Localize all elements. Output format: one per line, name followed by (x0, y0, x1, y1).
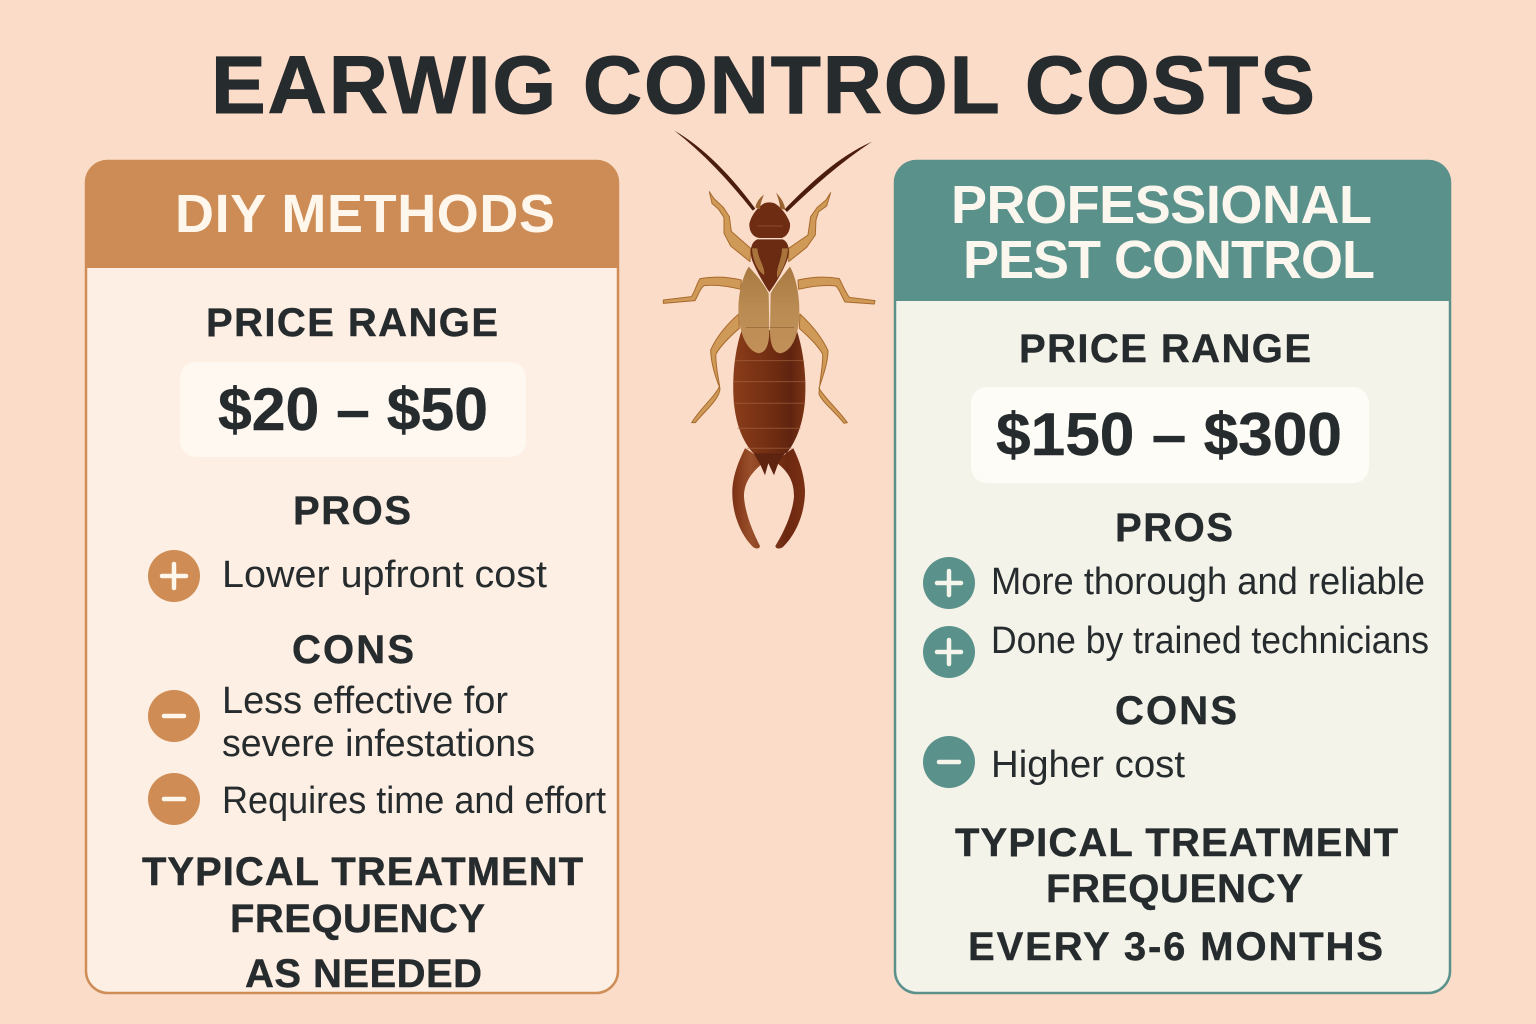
heading: professional cons: CONS (1115, 689, 1237, 733)
icon: minus (923, 736, 975, 788)
heading: professional treatment frequency: TYPICAL TREATMENT (955, 821, 1398, 865)
con item: less effective (148, 680, 535, 765)
wings (738, 267, 769, 353)
pro item: done by trained technicians: Done by trained technicians (991, 620, 1429, 662)
panel header: professional: PEST CONTROL (963, 230, 1375, 290)
heading: DIY cons: CONS (292, 628, 414, 672)
frequency value: as needed: AS NEEDED (245, 952, 482, 996)
panel: DIY methods (85, 160, 619, 996)
panel background: DIY (86, 161, 618, 993)
abdomen (733, 330, 805, 453)
abdomen segments (733, 361, 805, 448)
con item: higher cost (923, 736, 1185, 788)
price box: professional (971, 387, 1369, 483)
pro item: done by trained technicians (923, 620, 1429, 678)
price box: professional: $150 – $300 (996, 401, 1342, 468)
heading: professional treatment frequency: FREQUENCY (1046, 867, 1303, 911)
antennae (674, 131, 872, 212)
wing bases (752, 248, 788, 278)
pronotum (751, 239, 789, 292)
panel: professional pest control (894, 160, 1451, 993)
icon: plus (148, 550, 200, 602)
mandibles (755, 193, 785, 210)
heading: DIY treatment frequency: TYPICAL TREATMENT (142, 850, 583, 894)
con item: less effective: Less effective for (222, 680, 508, 722)
frequency value: every 3-6 months: EVERY 3-6 MONTHS (968, 925, 1383, 969)
heading: DIY price range: PRICE RANGE (206, 301, 498, 345)
title: EARWIG CONTROL COSTS (211, 40, 1315, 131)
tail spikes (752, 450, 787, 475)
pro item: lower upfront cost (148, 550, 547, 602)
pro item: more thorough (923, 557, 1425, 609)
icon: minus (148, 773, 200, 825)
heading: professional pros: PROS (1115, 506, 1233, 550)
head (749, 202, 790, 238)
icon: plus (923, 557, 975, 609)
panel header: DIY: DIY METHODS (175, 184, 555, 244)
heading: professional price range: PRICE RANGE (1019, 327, 1311, 371)
con item: requires time (148, 773, 606, 825)
illustration: earwig (663, 131, 875, 549)
head band (757, 225, 783, 227)
panel background: professional (895, 161, 1450, 993)
pro item: lower upfront cost: Lower upfront cost (222, 554, 547, 596)
con item: less effective: severe infestations (222, 723, 535, 765)
heading: professional treatment frequency (955, 821, 1398, 911)
heading: DIY treatment frequency (142, 850, 583, 941)
icon: plus (923, 626, 975, 678)
heading: DIY pros: PROS (293, 489, 411, 533)
con item: requires time: Requires time and effort (222, 780, 606, 822)
pincers (732, 448, 805, 549)
price box: DIY (180, 362, 526, 457)
legs (663, 192, 875, 423)
price box: DIY: $20 – $50 (218, 376, 488, 443)
pro item: more thorough: More thorough and reliable (991, 561, 1425, 603)
panel header: professional (894, 160, 1451, 301)
wing fold lines (746, 326, 794, 328)
icon: minus (148, 690, 200, 742)
con item: higher cost: Higher cost (991, 744, 1185, 786)
panel header: DIY (85, 160, 619, 268)
panel header: professional: PROFESSIONAL (951, 175, 1372, 235)
heading: DIY treatment frequency: FREQUENCY (230, 897, 485, 941)
